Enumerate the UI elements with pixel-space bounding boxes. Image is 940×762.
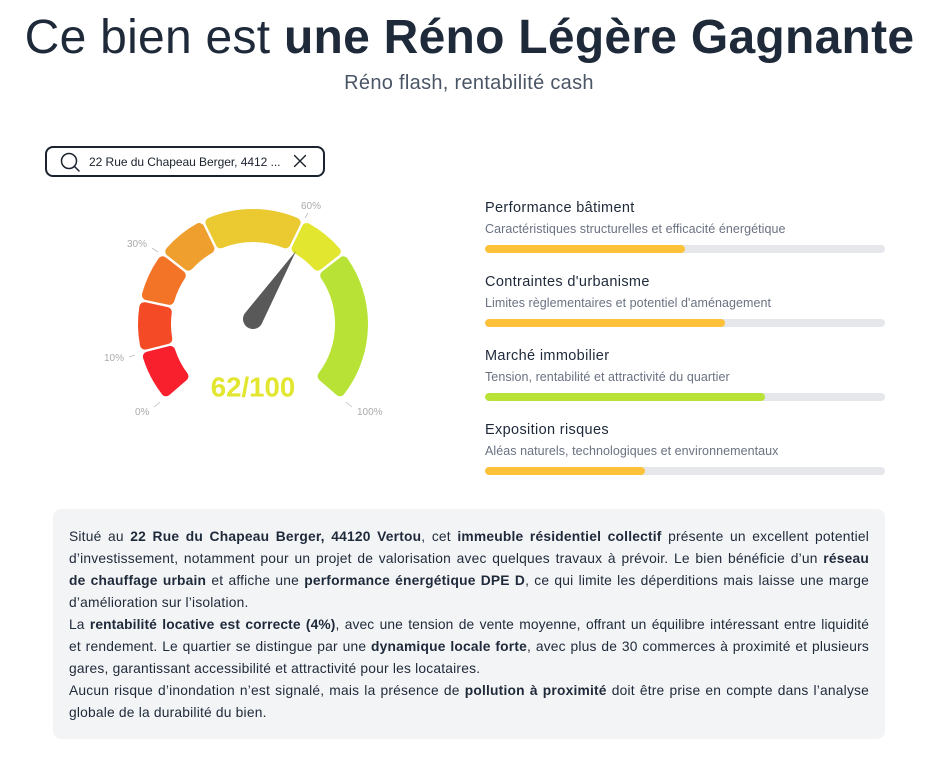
- metric: exposition risques: Aléas naturels, technologiques et environnementaux: [485, 444, 778, 458]
- panel: description: d’amélioration sur l’isolation.: [69, 595, 249, 610]
- metric: performance bâtiment: [485, 200, 885, 253]
- panel: description: globale de la durabilité du bien.: [69, 705, 267, 720]
- gauge segments: [143, 214, 363, 391]
- address search box: [45, 146, 325, 177]
- gauge percent labels: 0%: [135, 407, 150, 418]
- address text: 22 Rue du Chapeau Berger, 4412 ...: [89, 155, 280, 169]
- panel: description: d’investissement, notamment pour un projet de valorisation avec quelques travaux à prévoir. Le bien bénéficie d’un réseau: [69, 551, 869, 566]
- gauge chart: [104, 201, 383, 418]
- gauge percent labels: 100%: [357, 407, 383, 418]
- subtitle: Réno flash, rentabilité cash: [344, 72, 594, 94]
- metric: marché immobilier: [485, 348, 885, 401]
- gauge percent labels: 60%: [301, 201, 321, 212]
- panel: description: de chauffage urbain et affiche une performance énergétique DPE D, ce qui limite les déperditions mais laisse une marge: [69, 573, 869, 588]
- metric: contraintes d'urbanisme: Contraintes d'urbanisme: [485, 274, 650, 290]
- metric: exposition risques: [485, 422, 885, 475]
- panel: description: Aucun risque d’inondation n’est signalé, mais la présence de pollution à proximité doit être prise en compte dans l’analyse: [69, 683, 869, 698]
- panel: description: [53, 509, 885, 739]
- metric: marché immobilier: Tension, rentabilité et attractivité du quartier: [485, 370, 730, 384]
- gauge percent labels: 30%: [127, 239, 147, 250]
- metric: contraintes d'urbanisme: [485, 274, 885, 327]
- metric: exposition risques: Exposition risques: [485, 422, 609, 438]
- panel: description: et rendement. Le quartier se distingue par une dynamique locale forte, avec plus de 30 commerces à proximité et plusieurs: [69, 639, 869, 654]
- panel: description: Situé au 22 Rue du Chapeau Berger, 44120 Vertou, cet immeuble résidentiel collectif présente un excellent potentiel: [69, 529, 869, 544]
- gauge ticks: [129, 213, 352, 407]
- gauge percent labels: 10%: [104, 353, 124, 364]
- metric: marché immobilier: Marché immobilier: [485, 348, 609, 364]
- metric: performance bâtiment: Caractéristiques structurelles et efficacité énergétique: [485, 222, 786, 236]
- panel: description: La rentabilité locative est correcte (4%), avec une tension de vente moyenne, offrant un équilibre intéressant entre liquidité: [69, 617, 869, 632]
- icon: close cross: [294, 154, 306, 168]
- metric: performance bâtiment: Performance bâtiment: [485, 200, 635, 216]
- score: 62/100: [211, 372, 295, 402]
- gauge percent labels: [104, 201, 383, 418]
- metric: contraintes d'urbanisme: Limites règlementaires et potentiel d'aménagement: [485, 296, 771, 310]
- icon: magnifier: [60, 152, 80, 172]
- panel: description: gares, garantissant accessibilité et attractivité pour les locataires.: [69, 661, 480, 676]
- needle: [243, 251, 296, 329]
- title: Ce bien est une Réno Légère Gagnante: [25, 11, 914, 64]
